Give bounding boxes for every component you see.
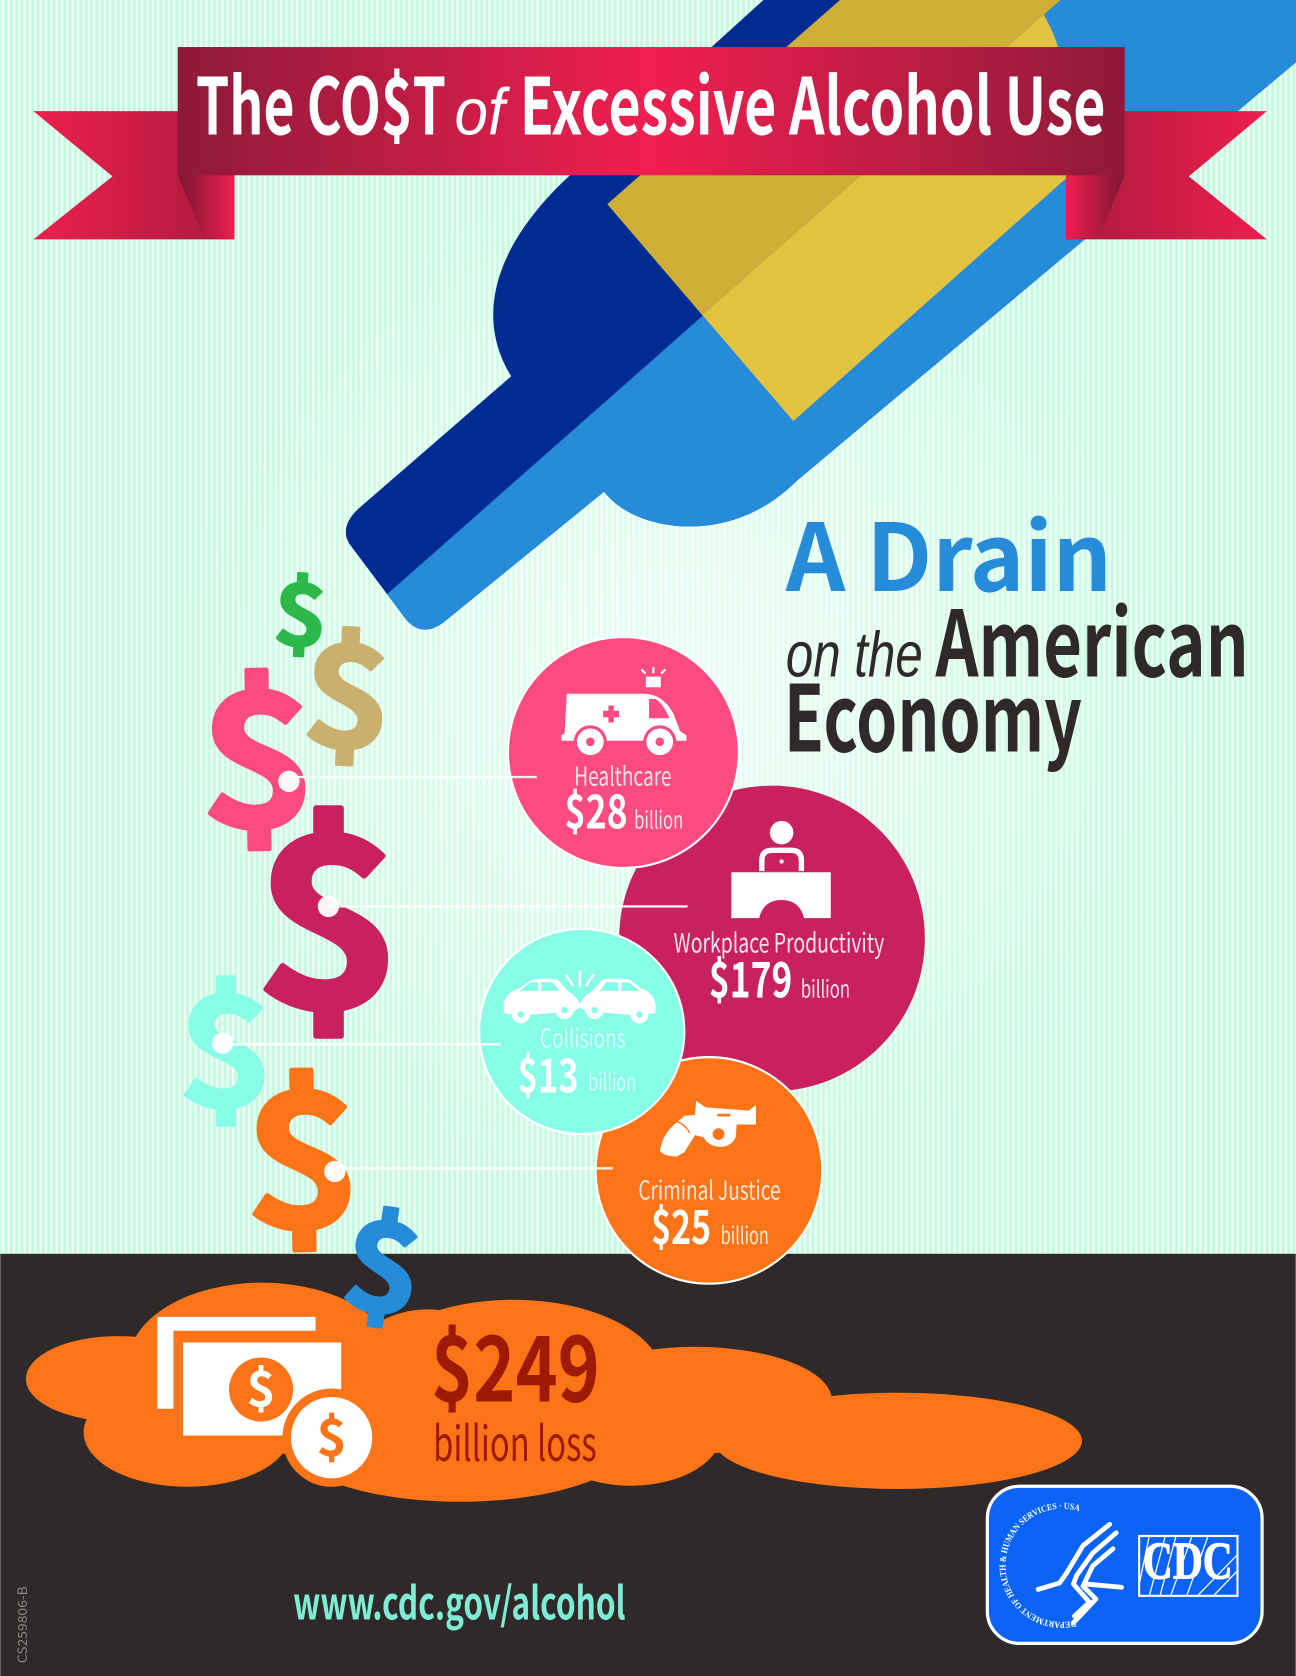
bottle label: [607, 0, 1070, 421]
circle: collisions: Collisions: [540, 1018, 626, 1055]
title: The CO$T: [196, 45, 446, 158]
ribbon left tail: [33, 111, 234, 239]
bottle highlight side: [380, 0, 1296, 663]
pink dollar: $: [197, 612, 318, 881]
circle: healthcare: $28: [565, 773, 628, 842]
ribbon band: [178, 47, 1125, 175]
title ribbon: [33, 45, 1267, 239]
circle: collisions: [479, 929, 684, 1134]
icon: money bills and coin: [157, 1317, 381, 1487]
aqua dollar: $: [178, 929, 274, 1151]
orange puddle: [26, 1283, 1082, 1502]
icon: money bills and coin: $: [316, 1396, 347, 1471]
total: $249 billion loss: billion loss: [433, 1405, 597, 1475]
blue dollar: $: [333, 1164, 435, 1352]
HHS and CDC logo badge: [986, 1484, 1264, 1645]
title: of: [455, 76, 511, 150]
connector lines and dots: [212, 771, 688, 1182]
CDC logo: CDC: [1143, 1531, 1233, 1591]
heading: A Drain on the American Economy: on the: [786, 619, 923, 691]
circle: criminal justice: [596, 1057, 822, 1284]
striped mint background: [0, 0, 1296, 1261]
dollar sign column: [178, 545, 435, 1352]
icon: ambulance: [561, 667, 686, 758]
circle: workplace productivity: billion: [801, 970, 850, 1004]
wine bottle: [321, 0, 1296, 663]
circle: criminal justice: billion: [721, 1217, 769, 1251]
circle: collisions: $13: [518, 1037, 579, 1106]
icon: revolver: [660, 1101, 756, 1157]
orange dollar: $: [241, 1012, 364, 1282]
icon: two cars colliding: [504, 971, 655, 1023]
circle: healthcare: Healthcare: [574, 757, 672, 794]
title: [196, 45, 1105, 158]
heading: A Drain on the American Economy: A Drain: [785, 483, 1112, 618]
circle: workplace productivity: [619, 786, 925, 1091]
circle: collisions: billion: [588, 1063, 636, 1097]
icon: money bills and coin: $: [247, 1351, 276, 1422]
tan dollar: $: [298, 583, 398, 791]
HHS seal: [1000, 1502, 1124, 1628]
circle: criminal justice: $25: [651, 1189, 711, 1258]
circle: criminal justice: Criminal Justice: [638, 1170, 781, 1207]
heading: A Drain on the American Economy: Economy: [784, 645, 1082, 778]
circle: workplace productivity: $179: [709, 941, 792, 1012]
ribbon right tail: [1066, 111, 1267, 239]
dark floor: [0, 1254, 1296, 1676]
publication code: CS259806-B: [12, 1586, 31, 1663]
green dollar: $: [271, 545, 331, 672]
icon: person at desk: [731, 821, 831, 918]
circle: healthcare: [508, 637, 739, 868]
website URL: www.cdc.gov/alcohol: [293, 1567, 626, 1632]
circle: healthcare: billion: [634, 801, 683, 835]
heading: A Drain on the American Economy: [784, 483, 1249, 778]
total: $249 billion loss: $249: [431, 1297, 600, 1428]
total: $249 billion loss: [431, 1297, 600, 1475]
circle: workplace productivity: Workplace Productivity: [674, 921, 884, 960]
HHS seal: DEPARTMENT OF HEALTH & HUMAN SERVICES · USA: [1000, 1502, 1080, 1628]
crimson dollar: $: [254, 736, 403, 1075]
